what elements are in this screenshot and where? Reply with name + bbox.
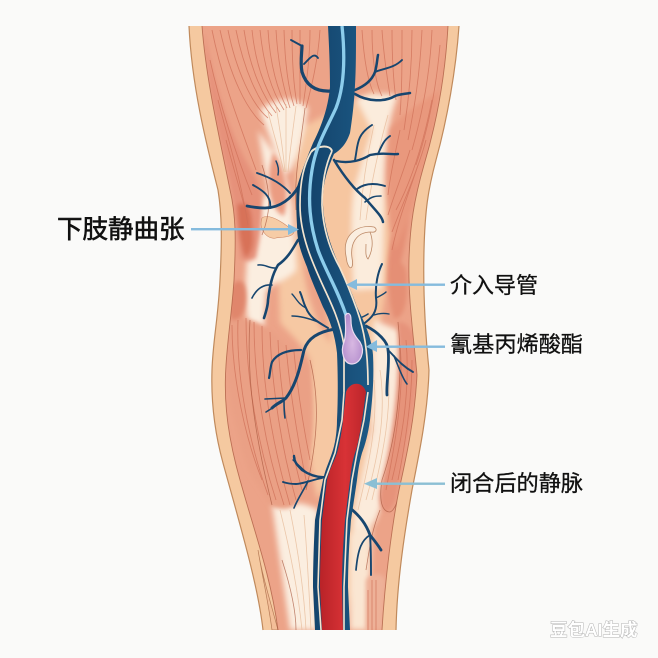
skin band inner line <box>202 26 448 630</box>
upper right branch <box>355 55 378 90</box>
label: cyanoacrylate: 氰基丙烯酸酯 <box>450 332 583 357</box>
left mid branch <box>247 186 299 208</box>
lower left vein near closed <box>294 456 326 477</box>
branching varicose veins <box>247 40 413 575</box>
watermark: 豆包AI生成 <box>550 620 638 640</box>
label: catheter: 介入导管 <box>450 273 538 298</box>
left pocket <box>261 217 294 238</box>
arrow: catheter <box>346 279 445 290</box>
mid right branch <box>336 154 398 162</box>
label: closed vein: 闭合后的静脉 <box>450 471 583 496</box>
skin layer <box>180 20 470 640</box>
soft tissue regions <box>202 26 448 630</box>
lower-left wedge <box>258 550 278 630</box>
upper fan tendon <box>260 99 308 172</box>
closed vein red fill <box>320 384 366 630</box>
lower left tendon <box>272 502 318 630</box>
arrow: closed vein <box>364 478 445 489</box>
upper left branch <box>301 46 331 91</box>
muscle outlines <box>249 108 404 630</box>
leg anatomy illustration <box>180 20 470 640</box>
right upper tendon <box>352 94 398 290</box>
left tendon cream <box>245 130 296 328</box>
lower right vein <box>350 508 381 550</box>
right tendon loop <box>345 227 376 268</box>
catheter <box>310 26 347 318</box>
right knee small vein <box>362 264 382 325</box>
muscle fibres <box>210 30 440 630</box>
arrow: cyanoacrylate <box>366 340 445 352</box>
vessel body <box>296 26 373 630</box>
cream vessel wall lines <box>300 151 368 392</box>
label: varicose veins: 下肢静曲张 <box>57 216 185 244</box>
main vein vessel <box>296 26 373 630</box>
small left vein group <box>300 292 328 328</box>
right lower branch <box>366 326 389 395</box>
darker muscle strips <box>204 30 262 261</box>
peach fat centre <box>296 90 392 630</box>
cyanoacrylate glue drop <box>342 313 362 364</box>
leg outline <box>189 26 459 630</box>
right lower tendon <box>350 318 400 532</box>
lower right tendon <box>350 520 372 630</box>
arrow: varicose veins <box>191 224 299 235</box>
closed vein walls <box>318 392 368 630</box>
big left branch below <box>272 329 335 408</box>
lower left branch off varicose <box>264 240 298 318</box>
